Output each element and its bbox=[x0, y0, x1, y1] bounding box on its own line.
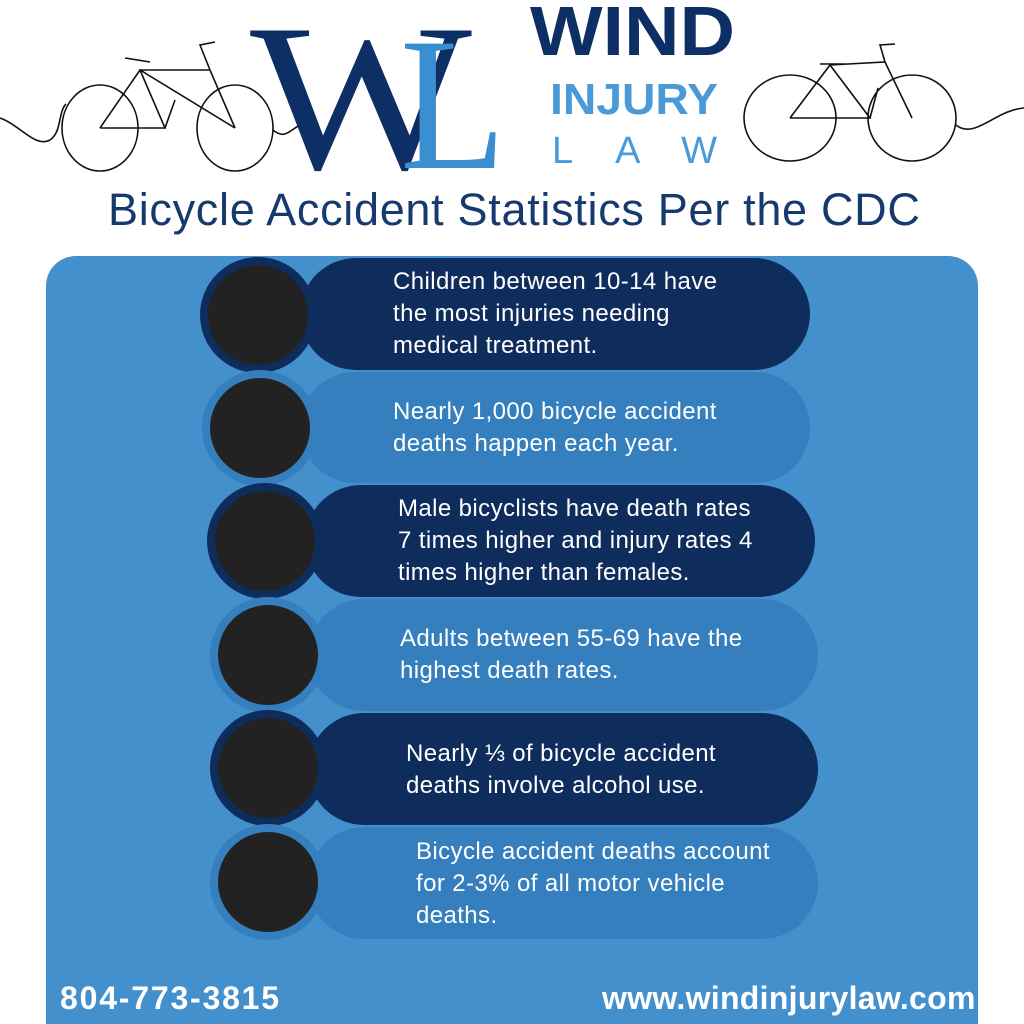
logo: INJURY: INJURY bbox=[550, 75, 718, 124]
stat item 2 shape bbox=[202, 370, 810, 486]
stat text 2: Nearly 1,000 bicycle accident bbox=[393, 398, 717, 425]
logo: LAW: LAW bbox=[552, 130, 717, 172]
stat text 4: Adults between 55-69 have the bbox=[400, 625, 743, 652]
stat text 6: Bicycle accident deaths account bbox=[416, 838, 770, 865]
stat item 6 shape bbox=[210, 824, 818, 940]
stat item 1 shape bbox=[200, 257, 810, 373]
stat text 3: 7 times higher and injury rates 4 bbox=[398, 527, 753, 554]
stat text 3: Male bicyclists have death rates bbox=[398, 495, 751, 522]
stat text 1 bbox=[393, 268, 717, 359]
stat text 5: Nearly ⅓ of bicycle accident bbox=[406, 740, 716, 767]
stat text 6: deaths. bbox=[416, 902, 498, 929]
phone number: 804-773-3815 bbox=[60, 980, 281, 1016]
stat text 2: deaths happen each year. bbox=[393, 430, 679, 457]
stat text 1: the most injuries needing bbox=[393, 300, 670, 327]
stat text 2 bbox=[393, 398, 717, 457]
stat text 4 bbox=[400, 625, 743, 684]
stat item 3 shape bbox=[207, 483, 815, 599]
stat text 3: times higher than females. bbox=[398, 559, 690, 586]
stat text 3 bbox=[398, 495, 753, 586]
title: Bicycle Accident Statistics Per the CDC bbox=[108, 184, 921, 235]
icon: right bicycle bbox=[744, 44, 1024, 161]
logo bbox=[0, 0, 1024, 180]
icon: left bicycle bbox=[0, 42, 300, 171]
stat item 4 shape bbox=[210, 597, 818, 713]
stat text 1: Children between 10-14 have bbox=[393, 268, 717, 295]
stat text 6 bbox=[416, 838, 770, 929]
panel: statistics bbox=[46, 256, 978, 1024]
stat text 5 bbox=[406, 740, 716, 799]
website: www.windinjurylaw.com bbox=[602, 980, 976, 1016]
stat text 5: deaths involve alcohol use. bbox=[406, 772, 705, 799]
stat text 1: medical treatment. bbox=[393, 332, 598, 359]
stat item 5 shape bbox=[210, 710, 818, 826]
stat text 6: for 2-3% of all motor vehicle bbox=[416, 870, 725, 897]
stat text 4: highest death rates. bbox=[400, 657, 619, 684]
